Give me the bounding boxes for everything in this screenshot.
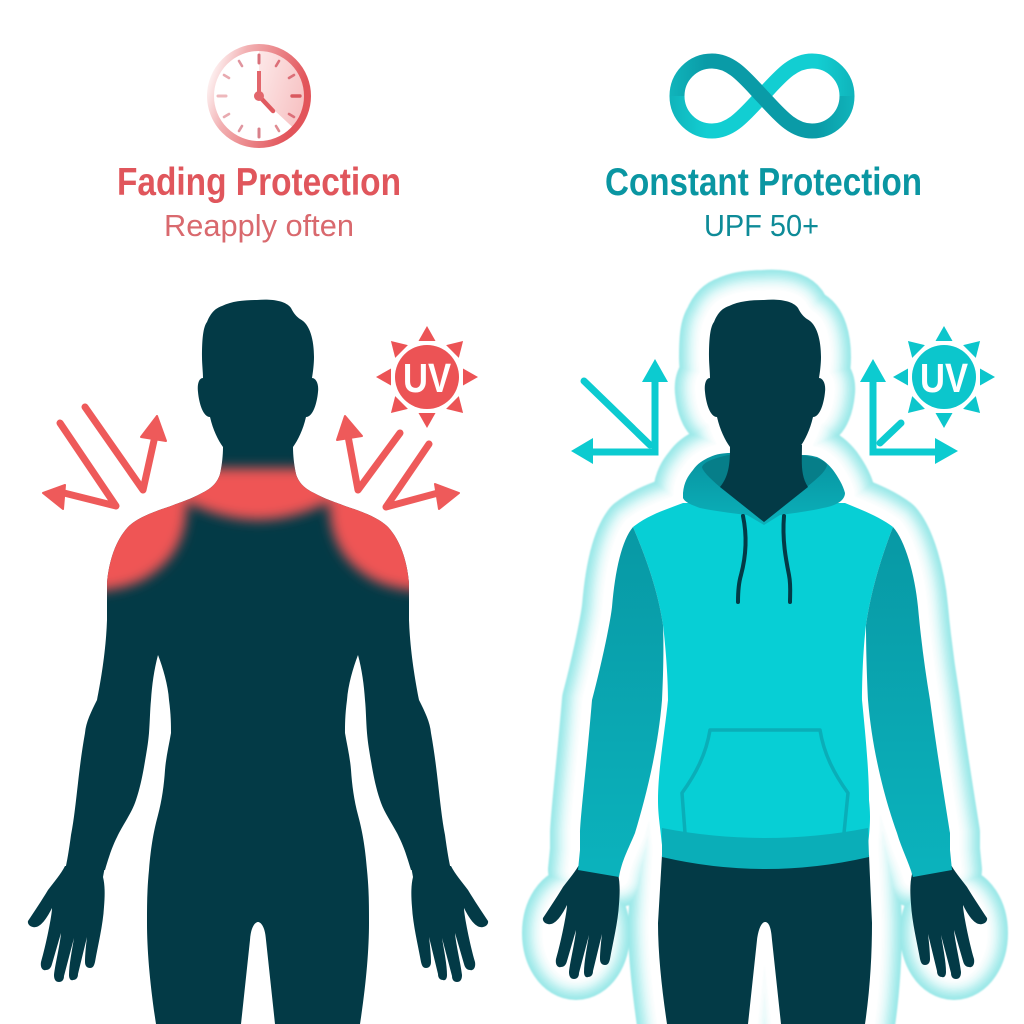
- panel: unprotected figure: [28, 300, 488, 1024]
- hoodie hood: [683, 453, 845, 525]
- drawstrings: [738, 516, 790, 602]
- icon: red UV sun: [376, 326, 478, 428]
- hoodie hem: [662, 828, 869, 869]
- text: UPF 50+: UPF 50+: [704, 208, 819, 243]
- heading: fading protection: Fading Protection: [117, 161, 401, 204]
- icon: red UV sun: UV: [403, 355, 452, 401]
- hoodie left sleeve: [578, 527, 663, 877]
- heading: constant protection: Constant Protection: [605, 161, 922, 204]
- arrows: UV blocked right: [860, 359, 958, 464]
- panel: protected figure: [543, 300, 995, 1024]
- silhouette: bare body: [28, 300, 488, 1024]
- pants: [658, 855, 872, 1024]
- panel: fading protection header: [117, 48, 401, 243]
- icon: fading clock: [210, 48, 308, 144]
- hoodie: [578, 453, 952, 877]
- icon: teal UV sun: UV: [920, 355, 969, 401]
- glow: protective aura: [552, 300, 978, 1024]
- hand: left: [543, 863, 620, 979]
- icon: infinity symbol: [677, 61, 847, 131]
- icon: teal UV sun: [893, 326, 995, 428]
- arrows: UV reflecting left: [43, 407, 166, 509]
- hood lining: [702, 455, 827, 522]
- panel: constant protection header: [605, 61, 922, 243]
- hand: right: [910, 863, 987, 979]
- arrows: UV reflecting right: [337, 416, 459, 509]
- hoodie right sleeve: [866, 527, 952, 877]
- arrows: UV blocked left: [571, 359, 668, 464]
- hoodie pocket: [682, 730, 848, 833]
- sunburn: neck and shoulders: [90, 468, 426, 592]
- text: reapply often: Reapply often: [164, 208, 354, 243]
- silhouette: head and neck: [705, 300, 825, 522]
- hoodie body: [633, 503, 893, 845]
